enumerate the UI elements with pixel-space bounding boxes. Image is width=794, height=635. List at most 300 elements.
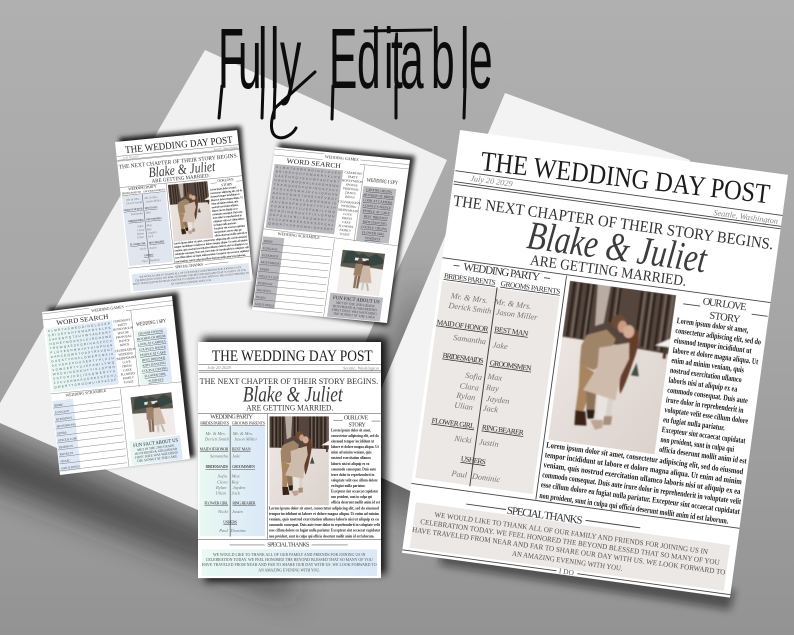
document: small blue newspaper: OUR LOVE bbox=[217, 177, 235, 183]
document: mint newspaper: Mr. & Mrs. bbox=[205, 431, 226, 436]
document: mint wedding games page: CAKE bbox=[123, 367, 132, 372]
document: mint wedding games page: BOYFRIEND & GIRLFRIEND bbox=[135, 447, 178, 456]
document: small blue newspaper: Rylan bbox=[136, 231, 145, 236]
document: mint newspaper: Jayden bbox=[233, 485, 246, 490]
document: large wedding newspaper: Sofia bbox=[465, 371, 483, 382]
document: mint newspaper: STORY bbox=[349, 423, 367, 429]
document: small blue newspaper: Jack bbox=[147, 234, 154, 238]
panel: i spy list: FLOWER GIRL bbox=[362, 230, 385, 236]
document: large wedding newspaper: FLOWER GIRL bbox=[431, 416, 476, 431]
document: small blue newspaper: Derick Smith bbox=[125, 200, 143, 206]
document: mint wedding games page: PEOPLE AT CAKE bbox=[140, 350, 166, 357]
document: small blue newspaper: RING BEARER bbox=[149, 240, 165, 245]
document: small blue newspaper: non proident, sunt in culpa qui officia deserunt mollit anim id est laborum. bbox=[175, 253, 246, 264]
document: small blue newspaper: BRIDES PARENTS bbox=[122, 191, 142, 196]
document: small blue newspaper: THE NEXT CHAPTER OF THEIR STORY BEGINS. bbox=[119, 153, 239, 171]
document: small blue newspaper: STORY bbox=[221, 182, 233, 187]
document: mint wedding games page: BRIDESMAID bbox=[116, 355, 137, 361]
document: mint wedding games page: Q W E R T Y G R O O M U I O P A S D F bbox=[54, 378, 116, 389]
document: mint wedding games page: NDAEC bbox=[60, 458, 71, 463]
document: mint wedding games page: EGNGAGE bbox=[55, 409, 70, 415]
document: mint newspaper: Paul bbox=[218, 528, 229, 533]
document: mint newspaper: Sofia bbox=[218, 473, 228, 478]
background paper shadow: right sheet bbox=[330, 270, 440, 520]
document: mint newspaper: Samantha bbox=[210, 454, 229, 459]
document: mint newspaper: Max bbox=[231, 473, 240, 478]
document: mint newspaper: ARE GETTING MARRIED. bbox=[246, 404, 333, 413]
document: small blue newspaper: July 20 2029 bbox=[123, 154, 139, 160]
document: mint wedding games page: STEGUS LOSE bbox=[58, 436, 78, 443]
document: mint newspaper: HAVE TRAVELED FROM NEAR AND FAR TO SHARE OUR DAY WITH US. WE LOOK FORWARD TO bbox=[202, 562, 377, 567]
document: mint newspaper: laboris nisi ut aliquip ex ea bbox=[331, 461, 370, 466]
text block: love story: eu fugiat nulla pariatur. bbox=[663, 415, 726, 432]
document: mint wedding games page: S D F G H J K B L I S S Q W E R T Y U bbox=[53, 369, 115, 381]
document: mint newspaper: irure dolor in reprehenderit in bbox=[331, 472, 375, 477]
special thanks heading bbox=[465, 499, 641, 535]
document: mint newspaper: FLOWER GIRL bbox=[204, 501, 229, 506]
panel: scramble: BIDRE bbox=[264, 239, 273, 244]
document: small blue newspaper bbox=[115, 130, 253, 293]
document: small blue newspaper: non proident, sunt in culpa qui bbox=[214, 227, 242, 234]
document: mint wedding games page: WEDDING GAMES bbox=[91, 304, 124, 313]
document: mint wedding games page: RCEEMNOY bbox=[56, 415, 73, 422]
document: mint newspaper: Jack bbox=[232, 491, 241, 496]
document: mint wedding games page: B R I D E F G H T N M A R R Y K L P S bbox=[48, 326, 111, 337]
document: mint wedding games page: MOTHER OF BRIDE bbox=[136, 334, 166, 341]
text block: love story: Excepteur sint occaecat cupidatat bbox=[661, 425, 746, 445]
word search grid: C A K E O P Q T S U V W Y A D F O R T bbox=[275, 174, 340, 184]
document: small blue newspaper: SPECIAL THANKS bbox=[175, 262, 203, 269]
document: large wedding newspaper: GROOMS PARENTS bbox=[500, 279, 561, 296]
document: mint newspaper: veniam, quis nostrud exercitation ullamco laboris nisi ut aliquip ex ea bbox=[269, 517, 379, 522]
document: mint newspaper: non proident, sunt in culpa qui officia deserunt mollit anim id est laborum. bbox=[269, 534, 374, 539]
text block: thank you bbox=[410, 507, 729, 587]
document: small blue newspaper: Nicki bbox=[139, 246, 147, 251]
document: mint wedding games page: MOYENHONO bbox=[56, 422, 77, 429]
word search grid: Z X C V B N M A S D D R E S S F G H J bbox=[269, 217, 334, 227]
document: mint newspaper: WE WOULD LIKE TO THANK ALL OF OUR FAMILY AND FRIENDS FOR JOINING US IN bbox=[213, 552, 365, 557]
document: mint newspaper: MAID OF HONOR bbox=[200, 446, 229, 451]
document: mint wedding games page: FAMILY bbox=[122, 375, 135, 381]
document: mint wedding games page: WORD SEARCH bbox=[56, 314, 109, 327]
panel: scramble bbox=[253, 236, 332, 314]
document: mint wedding games page: BIDRE bbox=[54, 402, 63, 408]
document: small blue newspaper: CELEBRATION TODAY. WE FEEL HONORED THE BEYOND BLESSED THAT SO MANY OF YOU bbox=[135, 269, 247, 282]
word list: WEDDING bbox=[341, 204, 357, 209]
document: mint wedding games page: K L M R T A S W E D D I N G L O V E P bbox=[48, 322, 110, 333]
word list: DRESS bbox=[342, 216, 353, 221]
document: mint wedding games page: KIDS DANCING bbox=[142, 361, 167, 368]
document: large wedding newspaper: BRIDESMAIDS bbox=[442, 351, 484, 365]
location: Seattle, Washington bbox=[713, 208, 779, 226]
document: small blue newspaper: esse cillum dolore eu fugiat nulla pariatur. Excepteur sint occaecat cupidatat bbox=[175, 249, 249, 260]
document: mint newspaper: GROOMSMEN bbox=[232, 464, 255, 469]
panel: i spy list: KIDS DANCING bbox=[362, 220, 388, 226]
text block: thank you: WE WOULD LIKE TO THANK ALL OF OUR FAMILY AND FRIENDS FOR JOINING US IN bbox=[434, 510, 709, 556]
document: mint newspaper: BEST MAN bbox=[232, 446, 251, 451]
document: small blue newspaper: ARE GETTING MARRIED. bbox=[151, 173, 210, 185]
document: small blue newspaper: commodo consequat. Duis aute bbox=[212, 210, 243, 216]
document: mint wedding games page: SPOUSE bbox=[117, 330, 129, 335]
document: mint newspaper: Lorem ipsum dolor sit amet, consectetur adipiscing elit, sed do eiusmod bbox=[269, 506, 379, 511]
document: mint newspaper: SPECIAL THANKS bbox=[267, 543, 309, 549]
word list: FLOWERS bbox=[338, 224, 354, 229]
word list: CAKE bbox=[342, 220, 351, 225]
document: large wedding newspaper: Jayden bbox=[486, 394, 510, 406]
document: mint wedding games page: PARTY bbox=[117, 322, 128, 327]
document: large wedding newspaper: Samantha bbox=[453, 333, 487, 346]
document: small blue newspaper: eu fugiat nulla pariatur. bbox=[213, 221, 237, 227]
document: mint newspaper: WEDDING PARTY bbox=[210, 415, 254, 421]
document: mint wedding games page: SATOT RINGS bbox=[61, 464, 80, 470]
footer: I DO bbox=[558, 566, 575, 577]
document: mint newspaper: Nicki bbox=[217, 509, 228, 514]
document: mint wedding games page: EDSRS bbox=[57, 430, 67, 436]
word list: RINGS bbox=[345, 195, 355, 200]
document: mint wedding games page: DANCE bbox=[119, 338, 130, 343]
text block: love story: laboris nisi ut aliquip ex ea bbox=[668, 375, 739, 394]
document: mint newspaper: commodo consequat. Duis aute bbox=[331, 466, 376, 471]
word search grid: Q W E R T Y G R O O M U I O P A S D F bbox=[268, 221, 333, 231]
document: small blue newspaper: Ray bbox=[146, 227, 153, 231]
document: large wedding newspaper: Rylan bbox=[455, 391, 476, 402]
panel: scramble: EGNGAGE bbox=[263, 246, 278, 251]
document: mint newspaper: Mr. & Mrs. bbox=[232, 431, 253, 436]
background paper: right sheet bbox=[350, 93, 690, 510]
document: mint wedding games page: WEDDING SCRAMBLE bbox=[65, 388, 107, 398]
document: mint wedding games page: Z X C V B N M A S D D R E S S F G H J bbox=[54, 373, 116, 385]
panel: fun fact: BOYFRIEND & GIRLFRIEND bbox=[333, 304, 377, 312]
document: mint wedding games page: FLOWER GIRL bbox=[144, 372, 166, 378]
special thanks heading: SPECIAL THANKS bbox=[506, 505, 583, 527]
wedding party heading: WEDDING PARTY bbox=[463, 261, 541, 284]
text block: love story: irure dolor in reprehenderit in bbox=[665, 395, 744, 415]
panel: i spy list bbox=[356, 186, 396, 244]
document: mint newspaper: GROOMS PARENTS bbox=[232, 420, 266, 425]
document: large wedding newspaper: Derick Smith bbox=[447, 301, 492, 316]
heading: our love story bbox=[681, 294, 769, 329]
document: mint newspaper: Excepteur sint occaecat cupidatat bbox=[331, 488, 378, 493]
document: mint newspaper: Seattle, Washington bbox=[343, 366, 380, 372]
document: mint wedding games page: FUN FACT ABOUT US bbox=[133, 439, 179, 449]
word list: PROPOSAL bbox=[343, 186, 360, 192]
document: large wedding newspaper: Mr. & Mrs. bbox=[449, 291, 488, 305]
panel: scramble: DEIDWGN bbox=[258, 281, 273, 286]
document C shadow bbox=[48, 292, 195, 471]
document: gray wedding games page bbox=[252, 147, 410, 323]
word list: BRIDESMAID bbox=[338, 207, 359, 213]
text block: thank you: AN AMAZING EVENING WITH YOU. bbox=[512, 549, 623, 573]
document: large wedding newspaper: BEST MAN bbox=[494, 324, 530, 338]
panel: scramble: MOYENHONO bbox=[261, 260, 282, 266]
document: mint wedding games page: RWOELFS bbox=[59, 451, 74, 456]
document: small blue newspaper: nostrud exercitation ullamco bbox=[211, 203, 239, 209]
word search grid: T R E W Q A S D F G R I N G S Z X C V bbox=[274, 182, 338, 192]
document: small blue newspaper: voluptate velit esse cillum dolore bbox=[213, 216, 245, 223]
date: July 20 2029 bbox=[470, 174, 513, 189]
headline: THE NEXT CHAPTER OF THEIR STORY BEGINS. bbox=[452, 193, 774, 253]
document: mint newspaper: labore et dolore magna aliqua. Ut bbox=[331, 444, 379, 449]
panel: scramble: SATOT RINGS bbox=[255, 302, 275, 308]
document: mint wedding games page: WEDDING bbox=[118, 351, 134, 357]
panel: i spy list: MOTHER OF BRIDE bbox=[363, 193, 394, 200]
document: small blue newspaper: officia deserunt mollit anim id est bbox=[214, 231, 247, 238]
document: mint wedding games page: MET IN THE 2ND GRADE bbox=[137, 443, 175, 452]
document: mint wedding games page: T R E W Q A S D F G R I N G S Z X C V bbox=[50, 339, 112, 350]
word list: FAMILY bbox=[339, 228, 352, 233]
text block: love story: consectetur adipiscing elit, sed do bbox=[675, 326, 762, 347]
document: mint wedding games page: GROOM CRYING bbox=[138, 329, 164, 336]
panel: i spy list: COUPLE CRYING bbox=[360, 225, 388, 231]
document: small blue newspaper: HAVE TRAVELED FROM NEAR AND FAR TO SHARE OUR DAY WITH US. WE LOOK FORWARD TO bbox=[133, 272, 249, 286]
background paper: left sheet bbox=[0, 50, 447, 544]
text block: love story: eiusmod tempor incididunt ut bbox=[674, 336, 752, 355]
document: small blue newspaper: USHERS bbox=[144, 253, 154, 257]
document: mint wedding games page: RINGS bbox=[120, 342, 130, 347]
document: mint newspaper: consectetur adipiscing elit, sed do bbox=[331, 433, 379, 438]
document: mint wedding games page: HONEYMOON bbox=[113, 325, 134, 332]
document: small blue newspaper: MAID OF HONOR bbox=[123, 207, 143, 212]
text block: love story: enim ad minim veniam, quis bbox=[671, 356, 745, 375]
document: large wedding newspaper: Ray bbox=[484, 383, 500, 393]
document: small blue newspaper: Seattle, Washington bbox=[213, 145, 238, 152]
document: mint wedding games page: G U E S T Y H N F L O W E R S M K I U bbox=[51, 352, 113, 363]
couple names: Blake & Juliet bbox=[525, 212, 710, 281]
document: mint wedding games page: D A N C E Q W S T O A S T R F V B G T bbox=[51, 347, 113, 359]
document: mint wedding games page: PROPOSAL bbox=[116, 334, 132, 340]
document: small blue newspaper: Jake bbox=[145, 210, 152, 215]
text block: love story: commodo consequat. Duis aute bbox=[667, 385, 749, 405]
document: large wedding newspaper bbox=[402, 130, 788, 599]
word search grid: H O N E Y M O O N X L K J R G H S W E bbox=[274, 178, 339, 188]
document: mint newspaper: USHERS bbox=[223, 519, 238, 524]
document: large wedding newspaper: Jason Miller bbox=[495, 307, 539, 322]
panel: fun fact: MET IN THE 2ND GRADE bbox=[336, 301, 375, 308]
document: mint newspaper: voluptate velit esse cillum dolore bbox=[331, 477, 378, 482]
document: mint wedding games page: BEST DRESSED bbox=[142, 355, 166, 362]
heading: i spy: WEDDING I SPY bbox=[366, 178, 398, 186]
document: mint wedding games page: V O W S E R T Y U J K F A M I L Y W Q bbox=[52, 360, 115, 372]
document: mint newspaper: esse cillum dolore eu fugiat nulla pariatur. Excepteur sint occaecat cupidatat bbox=[269, 528, 380, 533]
panel: fun fact: THE SUNSET AT THE LAKE bbox=[333, 311, 375, 319]
document: small blue newspaper: Paul bbox=[141, 259, 148, 263]
document: small blue newspaper: Blake & Juliet bbox=[148, 159, 217, 181]
document: mint wedding games page: H O N E Y M O O N X L K J R G H S W E bbox=[49, 335, 111, 346]
document: small blue newspaper: consectetur adipiscing elit, sed do bbox=[210, 188, 243, 195]
word list: TOAST bbox=[339, 232, 350, 237]
word search grid bbox=[266, 164, 343, 234]
document: small blue newspaper: GROOMS PARENTS bbox=[143, 188, 166, 193]
document: mint newspaper: CELEBRATION TODAY. WE FEEL HONORED THE BEYOND BLESSED THAT SO MANY OF YOU bbox=[206, 557, 373, 562]
text block: lower story: veniam, quis nostrud exercitation ullamco laboris nisi ut aliquip ex ea bbox=[543, 460, 742, 496]
document: small blue newspaper: THE WEDDING DAY POST bbox=[125, 135, 234, 156]
document: mint wedding games page: COUPLE CRYING bbox=[142, 366, 168, 373]
panel: fun fact bbox=[327, 293, 383, 322]
word search grid: K L M R T A S W E D D I N G L O V E P bbox=[276, 165, 341, 175]
document: large wedding newspaper: Clara bbox=[459, 381, 479, 393]
document: small blue newspaper: Jason Miller bbox=[146, 198, 162, 204]
document: mint wedding games page: LOVE bbox=[122, 359, 131, 364]
text block: lower story bbox=[539, 440, 746, 527]
document B shadow bbox=[250, 143, 415, 326]
document: large wedding newspaper: Justin bbox=[479, 437, 499, 449]
document: small blue newspaper: Ulian bbox=[137, 235, 145, 239]
panel: i spy list: SUNDAYS bbox=[365, 236, 381, 241]
word search grid: V O W S E R T Y U J K F A M I L Y W Q bbox=[271, 204, 336, 214]
document: mint newspaper: RING BEARER bbox=[232, 501, 256, 506]
word search grid: G U E S T Y H N F L O W E R S M K I U bbox=[272, 195, 336, 205]
document: mint newspaper: eu fugiat nulla pariatur. bbox=[331, 483, 365, 488]
document: mint newspaper: Jason Miller bbox=[234, 436, 257, 441]
document: mint newspaper: Clara bbox=[217, 480, 228, 485]
document: mint newspaper: Ray bbox=[231, 480, 240, 485]
document: mint newspaper: Dominic bbox=[230, 528, 246, 533]
text block: love story: nostrud exercitation ullamco bbox=[669, 366, 742, 384]
panel: i spy list: BEST DRESSED bbox=[363, 214, 388, 221]
word search grid: W E D D I N G R G H T Y I K L O P M N bbox=[270, 208, 335, 218]
text block: love story: Lorem ipsum dolor sit amet, bbox=[676, 316, 749, 335]
document: large wedding newspaper: RING BEARER bbox=[481, 423, 524, 437]
document: small blue newspaper: AN AMAZING EVENING WITH YOU. bbox=[171, 279, 212, 286]
heading: our love story: STORY bbox=[709, 310, 741, 326]
photo: couple in snow bbox=[548, 280, 677, 455]
document: small blue newspaper: Excepteur sint occaecat cupidatat bbox=[214, 224, 245, 231]
panel: wedding party bbox=[415, 281, 560, 494]
panel: scramble: RCEEMNOY bbox=[262, 253, 280, 259]
document: small blue newspaper: GROOMSMEN bbox=[146, 217, 162, 221]
scramble title: WEDDING SCRAMBLE bbox=[277, 231, 321, 240]
document: large wedding newspaper: GROOMSMEN bbox=[489, 358, 533, 373]
document: mint newspaper: Jake bbox=[232, 454, 240, 459]
panel: scramble: NDAEC bbox=[256, 295, 267, 300]
document: small blue newspaper: Lorem ipsum dolor sit amet, consectetur adipiscing elit, sed do eiusmod bbox=[173, 234, 247, 246]
document: mint newspaper: Derick Smith bbox=[204, 436, 229, 441]
panel: i spy list: LOOK AT CAMERA bbox=[363, 198, 393, 205]
document: mint newspaper bbox=[198, 342, 381, 578]
text block: thank you: HAVE TRAVELED FROM NEAR AND FAR TO SHARE OUR DAY WITH US. WE LOOK FORWARD TO bbox=[412, 525, 727, 577]
document: mint wedding games page: DRESS bbox=[122, 363, 132, 369]
document: mint wedding games page: LOOK AT CAMERA bbox=[138, 339, 167, 347]
document: mint newspaper: BRIDESMAIDS bbox=[205, 464, 229, 469]
word list bbox=[334, 170, 365, 237]
document: mint newspaper: officia deserunt mollit anim id est bbox=[331, 499, 380, 504]
document: mint wedding games page: FIRST DATE WAS WATCHING bbox=[135, 450, 179, 460]
document: small blue newspaper: Sofia bbox=[137, 224, 144, 228]
panel: scramble: EDSRS bbox=[260, 267, 270, 272]
document: large wedding newspaper: Max bbox=[486, 372, 503, 383]
document: small blue newspaper: enim ad minim veniam, quis bbox=[211, 199, 239, 206]
text block: lower story: tempor incididunt ut labore et dolore magna aliqua. Ut enim ad minim bbox=[544, 450, 742, 486]
document: large wedding newspaper: Dominic bbox=[470, 472, 501, 484]
document: large wedding newspaper: Paul bbox=[450, 469, 468, 480]
document: large wedding newspaper: Jake bbox=[492, 340, 509, 351]
document: large wedding newspaper: MAID OF HONOR bbox=[436, 318, 489, 334]
document: mint newspaper: Blake & Juliet bbox=[243, 382, 343, 407]
heading: wedding games: WEDDING GAMES bbox=[325, 154, 359, 162]
document: large wedding newspaper: USHERS bbox=[460, 454, 486, 466]
heading: our love story: OUR LOVE bbox=[702, 296, 747, 313]
document A shadow bbox=[119, 126, 253, 290]
document: mint newspaper: BRIDES PARENTS bbox=[200, 420, 230, 425]
heading: wedding games bbox=[274, 149, 410, 169]
document: mint newspaper: enim ad minim veniam, quis bbox=[331, 450, 372, 455]
word list: SPOUSE bbox=[346, 183, 358, 188]
document: small blue newspaper: WE WOULD LIKE TO THANK ALL OF OUR FAMILY AND FRIENDS FOR JOINING US IN bbox=[139, 266, 241, 279]
document: small blue newspaper: veniam, quis nostrud exercitation ullamco laboris nisi ut aliquip ex ea bbox=[174, 242, 248, 253]
document: mint newspaper: eiusmod tempor incididunt ut bbox=[331, 439, 375, 444]
text block: love story: labore et dolore magna aliqua. Ut bbox=[672, 346, 759, 366]
document: small blue newspaper: Justin bbox=[149, 245, 157, 250]
panel: scramble: RWOELFS bbox=[257, 288, 271, 293]
heading: Fully Editable: Fully Editable bbox=[218, 12, 493, 107]
document: mint wedding games page: C A K E O P Q T S U V W Y A D F O R T bbox=[49, 330, 111, 342]
document: small blue newspaper: FLOWER GIRL bbox=[130, 242, 147, 247]
document: mint newspaper: Justin bbox=[232, 509, 244, 514]
document: small blue newspaper: tempor incididunt ut labore et dolore magna aliqua. Ut enim ad minim bbox=[174, 238, 248, 249]
document: mint newspaper: THE WEDDING DAY POST bbox=[212, 348, 373, 365]
document: mint newspaper: non proident, sunt in culpa qui bbox=[331, 494, 373, 499]
document: mint newspaper: Lorem ipsum dolor sit amet, bbox=[331, 428, 371, 433]
document: mint newspaper: OUR LOVE bbox=[344, 415, 369, 421]
sub headline: ARE GETTING MARRIED. bbox=[529, 253, 687, 290]
panel: i spy list: GROOM CRYING bbox=[366, 188, 393, 194]
document: small blue newspaper: BRIDESMAIDS bbox=[128, 219, 144, 223]
text block: thank you: CELEBRATION TODAY. WE FEEL HONORED THE BEYOND BLESSED THAT SO MANY OF YOU bbox=[420, 517, 721, 567]
document: mint newspaper: July 20 2029 bbox=[207, 365, 232, 370]
panel: scramble: STEGUS LOSE bbox=[259, 274, 279, 280]
document: small blue newspaper: commodo consequat. Duis aute irure dolor in reprehenderit in voluptate velit bbox=[175, 245, 249, 256]
document: mint newspaper: commodo consequat. Duis aute irure dolor in reprehenderit in voluptate velit bbox=[269, 522, 380, 527]
word search grid: D A N C E Q W S T O A S T R F V B G T bbox=[272, 191, 337, 201]
document: small blue newspaper: Samantha bbox=[131, 211, 144, 216]
document: large wedding newspaper: Jack bbox=[482, 404, 499, 415]
text block: love story: non proident, sunt in culpa qui bbox=[660, 435, 735, 454]
document: mint wedding games page: A C V B N S P O U S E R T Y P L K J H bbox=[52, 356, 114, 368]
word list: HONEYMOON bbox=[342, 178, 364, 184]
document: small blue newspaper: Mr. & Mrs. bbox=[125, 197, 140, 202]
document: small blue newspaper: Dominic bbox=[148, 258, 161, 263]
document: small blue newspaper: irure dolor in reprehenderit in bbox=[213, 213, 242, 220]
word list: LOVE bbox=[343, 212, 352, 217]
document: small blue newspaper: BEST MAN bbox=[145, 206, 158, 210]
document: mint wedding games page: THE SUNSET AT THE LAKE bbox=[137, 454, 177, 463]
document: mint wedding games page bbox=[42, 296, 190, 475]
document: small blue newspaper: labore et dolore magna aliqua. Ut bbox=[211, 195, 243, 202]
document: small blue newspaper: Lorem ipsum dolor sit amet, bbox=[210, 185, 237, 192]
document: mint wedding games page: SUNDAYS bbox=[148, 377, 164, 383]
document: mint wedding games page: W E D D I N G R G H T Y I K L O P M N bbox=[53, 365, 115, 376]
document: small blue newspaper: Clara bbox=[137, 228, 145, 232]
word list: CELEBRATION bbox=[338, 199, 361, 205]
background paper shadow bbox=[0, 425, 300, 600]
document: small blue newspaper: eiusmod tempor incididunt ut bbox=[210, 192, 240, 199]
word search grid: P L O V E B N M H J K Y U I O P D A N bbox=[273, 187, 338, 197]
panel: i spy list: COUPLE'S DANCE bbox=[363, 203, 391, 210]
panel: fun fact: FUN FACT ABOUT US bbox=[333, 295, 380, 305]
text block: love story: voluptate velit esse cillum dolore bbox=[664, 405, 749, 426]
document: mint wedding games page: COUPLE'S DANCE bbox=[139, 345, 166, 352]
document: small blue newspaper: Jayden bbox=[148, 230, 157, 235]
document D shadow bbox=[202, 337, 387, 582]
document: mint wedding games page: DEIDWGN bbox=[59, 444, 74, 450]
document: mint wedding games page: FLOWERS bbox=[121, 371, 136, 377]
big document shadow bbox=[440, 540, 735, 610]
document: mint wedding games page: P L O V E B N M H J K Y U I O P D A N bbox=[50, 343, 112, 355]
document: large wedding newspaper: Ulian bbox=[454, 401, 473, 412]
word search grid: A C V B N S P O U S E R T Y P L K J H bbox=[271, 200, 336, 210]
word list: CEREMONY bbox=[344, 170, 363, 176]
document: mint newspaper: tempor incididunt ut labore et dolore magna aliqua. Ut enim ad minim bbox=[269, 511, 379, 516]
